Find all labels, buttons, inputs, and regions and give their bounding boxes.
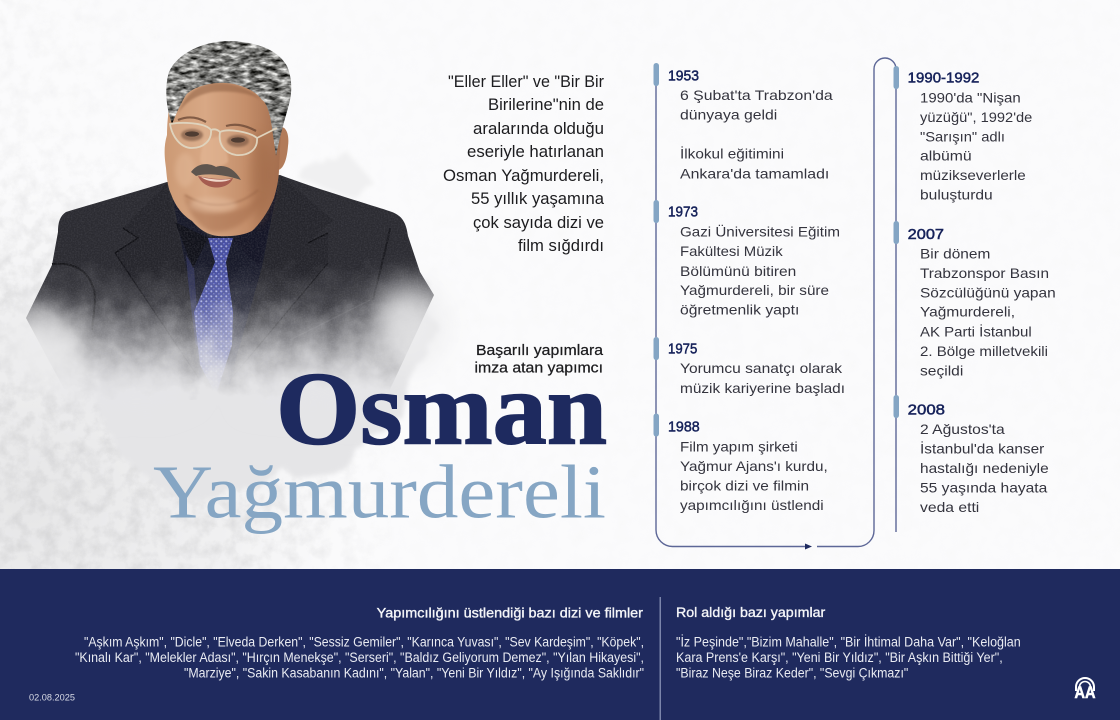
subtitle: Başarılı yapımlara bbox=[476, 343, 603, 359]
timeline entry: 1973 bbox=[654, 200, 840, 318]
timeline entry: 1973: öğretmenlik yaptı bbox=[680, 302, 799, 318]
cheek highlights bbox=[175, 153, 195, 187]
timeline entry: 1988 bbox=[654, 414, 828, 513]
lapels bbox=[188, 287, 196, 343]
footer column: acting roles: "İz Peşinde","Bizim Mahalle", "Bir İhtimal Daha Var", "Keloğlan bbox=[676, 635, 1021, 650]
timeline entry: 2008: veda etti bbox=[920, 499, 979, 515]
timeline entry: 1973: Gazi Üniversitesi Eğitim bbox=[680, 223, 840, 240]
timeline entry: 1988: yapımcılığını üstlendi bbox=[680, 497, 824, 513]
timeline entry: 2007: seçildi bbox=[920, 363, 963, 379]
footer column: produced works: "Kınalı Kar", "Melekler Adası", "Hırçın Menekşe", "Serseri", "Baldız Geliyorum Demez", "Yılan Hikayesi", bbox=[75, 650, 644, 665]
collars bbox=[175, 222, 208, 268]
timeline entry: 2008: 55 yaşında hayata bbox=[920, 480, 1048, 496]
icon: AA logo: AA bbox=[1074, 683, 1096, 702]
timeline entry: 1953: 6 Şubat'ta Trabzon'da bbox=[680, 87, 833, 103]
timeline entry: 2008: İstanbul'da kanser bbox=[920, 440, 1045, 457]
timeline entry: 2007: Trabzonspor Basın bbox=[920, 265, 1049, 281]
page background bbox=[0, 0, 1120, 570]
title: surname: Yağmurdereli bbox=[153, 450, 606, 534]
footer column: acting roles: Rol aldığı bazı yapımlar bbox=[676, 605, 826, 620]
intro quote text bbox=[443, 73, 605, 255]
icon: AA logo bbox=[1074, 678, 1096, 702]
face bbox=[165, 79, 281, 236]
timeline entry: 1990-1992: 1990-1992 bbox=[908, 70, 979, 86]
timeline entry: 1953 bbox=[654, 63, 833, 181]
intro quote text: "Eller Eller" ve "Bir Bir bbox=[448, 73, 604, 91]
fog over lower sleeves bbox=[6, 280, 444, 406]
timeline entry: 1953: dünyaya geldi bbox=[680, 106, 777, 122]
intro quote text: eseriyle hatırlanan bbox=[467, 143, 604, 161]
timeline entry: 2007: Bir dönem bbox=[920, 245, 990, 261]
date: 02.08.2025 bbox=[29, 692, 75, 703]
timeline entry: 1973: Fakültesi Müzik bbox=[680, 243, 784, 259]
intro quote text: Osman Yağmurdereli, bbox=[443, 167, 604, 185]
timeline entry: 2007 bbox=[894, 221, 1056, 379]
textured paper background bbox=[0, 150, 350, 569]
subtitle: imza atan yapımcı bbox=[474, 361, 603, 377]
timeline entry: 1973: Bölümünü bitiren bbox=[680, 263, 796, 279]
forehead shadow under hair bbox=[178, 83, 265, 113]
timeline entry: 1990-1992: yüzüğü", 1992'de bbox=[920, 109, 1033, 125]
eyes and glasses bbox=[170, 117, 277, 155]
timeline entry: 1990-1992: buluşturdu bbox=[920, 187, 993, 203]
timeline entry: 2008 bbox=[894, 395, 1049, 515]
timeline entry: 1953: İlkokul eğitimini bbox=[680, 145, 784, 162]
footer panel bbox=[0, 569, 1120, 720]
footer column: produced works: "Marziye", "Sakin Kasabanın Kadını", "Yalan", "Yeni Bir Yıldız", "Ay Işığında Saklıdır" bbox=[184, 665, 644, 680]
timeline entry: 1973: Yağmurdereli, bir süre bbox=[680, 282, 829, 298]
timeline entry: 2008: hastalığı nedeniyle bbox=[920, 460, 1049, 476]
footer column: acting roles: "Biraz Neşe Biraz Keder", "Sevgi Çıkmazı" bbox=[676, 665, 908, 680]
intro quote text: aralarında olduğu bbox=[473, 120, 604, 138]
timeline entry: 1975: 1975 bbox=[668, 341, 697, 357]
cheek and jaw shading bbox=[251, 130, 273, 225]
timeline entry: 1975: Yorumcu sanatçı olarak bbox=[680, 360, 843, 376]
timeline entry: 2007: 2007 bbox=[908, 227, 944, 243]
footer column: acting roles: Kara Prens'e Karşı", "Yeni Bir Yıldız", "Bir Aşkın Bittiği Yer", bbox=[676, 650, 1003, 665]
timeline entry: 1990-1992: 1990'da "Nişan bbox=[920, 89, 1021, 105]
intro quote text: Birilerine"nin de bbox=[488, 96, 604, 114]
timeline entry: 1975: müzik kariyerine başladı bbox=[680, 380, 845, 396]
timeline entry: 1988: birçok dizi ve filmin bbox=[680, 478, 809, 494]
sleeves folds bbox=[52, 264, 95, 330]
intro quote text: film sığdırdı bbox=[518, 237, 604, 255]
timeline entry: 1973: 1973 bbox=[668, 205, 698, 221]
timeline entry: 2007: 2. Bölge milletvekili bbox=[920, 343, 1048, 359]
tie bbox=[194, 238, 233, 395]
timeline entry: 1988: Yağmur Ajans'ı kurdu, bbox=[680, 458, 828, 474]
footer column: produced works: Yapımcılığını üstlendiği bazı dizi ve filmler bbox=[377, 605, 644, 620]
timeline entry: 1990-1992: albümü bbox=[920, 148, 972, 164]
footer column: acting roles bbox=[676, 605, 1021, 680]
timeline connector with arrow bbox=[656, 58, 896, 550]
jacket and shirt bbox=[26, 175, 434, 400]
intro quote text: 55 yıllık yaşamına bbox=[471, 190, 605, 208]
timeline entry: 2007: Yağmurdereli, bbox=[920, 304, 1015, 320]
timeline entry: 1990-1992 bbox=[894, 66, 1033, 203]
head bbox=[165, 79, 288, 236]
title: first name: Osman bbox=[276, 352, 607, 466]
ear bbox=[275, 127, 288, 170]
timeline entry: 1953: Ankara'da tamamladı bbox=[680, 165, 829, 181]
timeline entry: 2007: AK Parti İstanbul bbox=[920, 322, 1032, 339]
timeline entry: 2007: Sözcülüğünü yapan bbox=[920, 285, 1056, 301]
portrait photo illustration bbox=[6, 41, 444, 406]
timeline entry: 1990-1992: müzikseverlerle bbox=[920, 167, 1026, 183]
timeline entry: 1975 bbox=[654, 337, 845, 396]
footer column: produced works bbox=[75, 605, 644, 680]
intro quote text: çok sayıda dizi ve bbox=[473, 214, 604, 232]
footer column: produced works: "Aşkım Aşkım", "Dicle", "Elveda Derken", "Sessiz Gemiler", "Karınca Yuvası", "Sev Kardeşim", "Köpek", bbox=[84, 635, 644, 650]
timeline entry: 1988: Film yapım şirketi bbox=[680, 439, 798, 455]
moustache and mouth bbox=[191, 164, 241, 188]
timeline entry: 1990-1992: "Sarışın" adlı bbox=[920, 129, 1005, 145]
timeline entry: 2008: 2008 bbox=[908, 402, 945, 418]
hair bbox=[166, 41, 291, 156]
timeline entry: 1988: 1988 bbox=[668, 420, 700, 436]
subtitle bbox=[474, 343, 603, 377]
timeline entry: 1953: 1953 bbox=[668, 68, 699, 84]
timeline entry: 2008: 2 Ağustos'ta bbox=[920, 421, 1005, 437]
shirt bbox=[173, 185, 278, 342]
nose bbox=[200, 136, 228, 167]
watercolor wash behind portrait bbox=[85, 150, 432, 502]
